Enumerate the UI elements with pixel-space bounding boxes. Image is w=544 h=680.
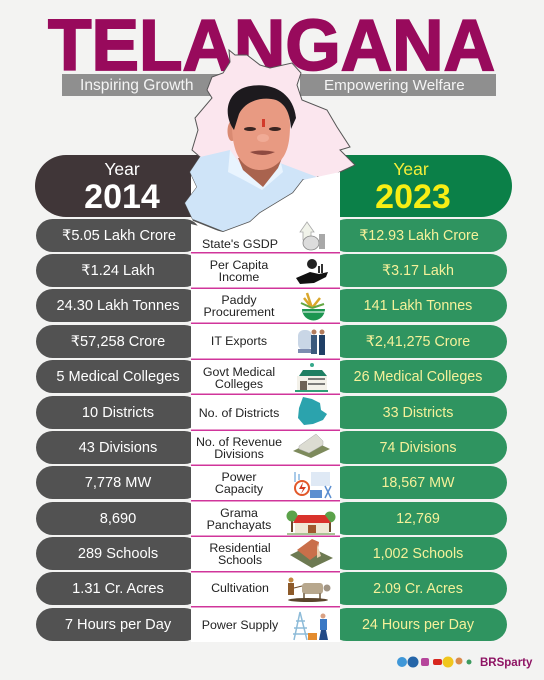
row 7: No. of Revenue Divisions — [36, 431, 507, 464]
row 12: Power Supply: 24 Hours per Day — [362, 617, 475, 633]
icon: hand with coin — [296, 259, 328, 284]
icon: paddy — [301, 293, 325, 320]
panel: centre labels: Paddy — [221, 293, 257, 307]
row 12: Power Supply — [36, 608, 507, 641]
row 5: Govt Medical Colleges: 5 Medical Colleges — [56, 369, 180, 385]
map of Telangana with portrait — [185, 50, 355, 232]
panel: centre labels: Panchayats — [207, 518, 271, 532]
map outline — [185, 50, 355, 232]
panel: centre labels: Capacity — [215, 482, 264, 496]
panel: centre labels: Grama — [220, 506, 258, 520]
row 2: Per Capita Income — [36, 254, 507, 287]
icon: medical college — [295, 363, 328, 392]
panel: centre labels: Colleges — [215, 377, 263, 391]
portrait: features — [244, 119, 281, 155]
row 6: No. of Districts: 33 Districts — [383, 405, 453, 421]
portrait: coast line — [193, 177, 328, 232]
portrait: shirt — [185, 150, 317, 232]
panel: centre labels: IT Exports — [211, 334, 267, 348]
panel: centre labels: Per Capita — [210, 258, 268, 272]
row 12: Power Supply: 7 Hours per Day — [65, 617, 172, 633]
panel: centre labels: No. of Revenue — [196, 435, 282, 449]
icon: power tower and worker — [293, 612, 328, 640]
banner: Inspiring Growth: Inspiring Growth — [80, 77, 194, 94]
brand name: BRSparty — [480, 657, 533, 669]
banner: Inspiring Growth — [62, 74, 220, 96]
portrait: collar — [228, 150, 283, 190]
row 11: Cultivation — [36, 572, 507, 605]
portrait: ears — [228, 121, 236, 141]
panel: centre labels: Power — [221, 470, 257, 484]
row 7: No. of Revenue Divisions: 43 Divisions — [79, 440, 157, 456]
portrait: hair — [228, 85, 296, 130]
row 1: State's GSDP — [36, 219, 507, 252]
row 10: Residential Schools: 1,002 Schools — [373, 546, 463, 562]
row 1: State's GSDP: ₹12.93 Lakh Crore — [359, 228, 479, 244]
panel: centre labels: Power Supply — [202, 618, 279, 632]
banner: Empowering Welfare: Empowering Welfare — [324, 77, 465, 94]
icon: school — [290, 539, 333, 568]
banner: Empowering Welfare — [300, 74, 496, 96]
row 8: Power Capacity — [36, 466, 507, 499]
icon: share — [466, 660, 472, 664]
icon: koo — [456, 658, 462, 664]
portrait: neck — [238, 158, 282, 187]
row 3: Paddy Procurement: 141 Lakh Tonnes — [364, 298, 472, 314]
icon: businessmen — [298, 330, 325, 355]
panel: centre labels: State's GSDP — [202, 237, 278, 251]
row 10: Residential Schools: 289 Schools — [78, 546, 158, 562]
header pill: 2023: Year — [393, 159, 429, 179]
row 3: Paddy Procurement: 24.30 Lakh Tonnes — [56, 298, 180, 314]
panel: centre labels: No. of Districts — [199, 406, 279, 420]
icon: panchayat house — [286, 510, 336, 535]
row 5: Govt Medical Colleges: 26 Medical Colleges — [354, 369, 482, 385]
panel: centre column top — [191, 172, 340, 234]
row 9: Grama Panchayats: 8,690 — [100, 511, 136, 527]
row 5: Govt Medical Colleges — [36, 360, 507, 393]
header pill: 2014: 2014 — [84, 178, 160, 216]
row 1: State's GSDP: ₹5.05 Lakh Crore — [62, 228, 176, 244]
panel: centre labels: Govt Medical — [203, 365, 275, 379]
row 6: No. of Districts — [36, 396, 507, 429]
icon: district map — [298, 397, 327, 425]
row 4: IT Exports: ₹2,41,275 Crore — [366, 334, 470, 350]
icon: instagram — [421, 658, 429, 666]
row 8: Power Capacity: 18,567 MW — [381, 475, 455, 491]
icon: twitter — [397, 657, 407, 667]
icon: ploughing cattle — [288, 578, 330, 602]
panel: centre labels: Residential — [209, 541, 271, 555]
icon: revenue building — [293, 434, 330, 458]
row 2: Per Capita Income: ₹3.17 Lakh — [382, 263, 454, 279]
title: TELANGANA — [48, 6, 495, 86]
panel: centre labels: Cultivation — [211, 581, 269, 595]
row 11: Cultivation: 2.09 Cr. Acres — [373, 581, 463, 597]
icon: youtube — [433, 659, 442, 665]
icon: money bag — [300, 222, 325, 250]
row 2: Per Capita Income: ₹1.24 Lakh — [81, 263, 155, 279]
row 4: IT Exports — [36, 325, 507, 358]
row 10: Residential Schools — [36, 537, 507, 570]
icon: power capacity — [295, 472, 331, 498]
row 11: Cultivation: 1.31 Cr. Acres — [72, 581, 164, 597]
icon: facebook — [408, 656, 418, 668]
row 7: No. of Revenue Divisions: 74 Divisions — [379, 440, 457, 456]
header pill: 2023 — [330, 155, 512, 217]
header pill: 2023: 2023 — [375, 178, 451, 216]
white lower map area — [223, 172, 340, 232]
panel: centre labels: Procurement — [204, 305, 275, 319]
panel: centre labels: Divisions — [214, 447, 264, 461]
row 9: Grama Panchayats: 12,769 — [396, 511, 440, 527]
header pill: 2014: Year — [104, 159, 140, 179]
header pill: 2014 — [35, 155, 200, 217]
row 6: No. of Districts: 10 Districts — [82, 405, 154, 421]
panel: centre labels: Income — [219, 270, 259, 284]
portrait: face — [232, 92, 290, 170]
panel: centre labels — [191, 172, 340, 642]
icon: snapchat — [442, 656, 454, 668]
row 3: Paddy Procurement — [36, 289, 507, 322]
row 8: Power Capacity: 7,778 MW — [85, 475, 151, 491]
row 4: IT Exports: ₹57,258 Crore — [71, 334, 165, 350]
social media footer — [397, 656, 533, 669]
row 9: Grama Panchayats — [36, 502, 507, 535]
panel: centre labels: Schools — [218, 553, 262, 567]
